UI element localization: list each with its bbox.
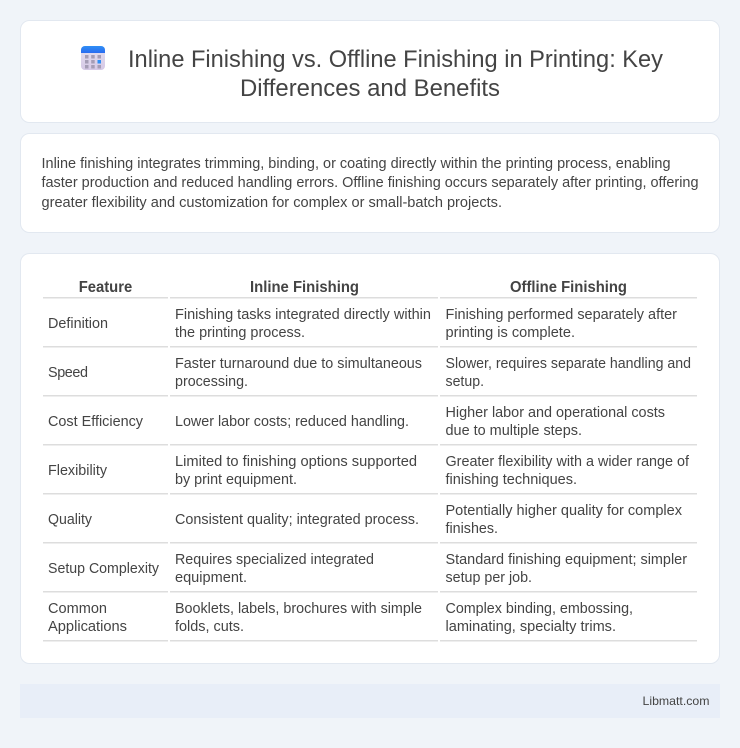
row: Cost Efficiency: Higher labor and operational costs [446,405,665,421]
row: Speed [43,356,697,396]
title [128,46,663,102]
row: Cost Efficiency [43,405,697,446]
row: Speed: Slower, requires separate handling and [446,356,691,372]
table header row [43,279,697,298]
footer [20,684,720,718]
summary paragraph: greater flexibility and customization for complex or small-batch projects. [42,195,502,211]
row: Definition: Finishing performed separately after [446,307,677,323]
title: Inline Finishing vs. Offline Finishing in Printing: Key [128,46,663,73]
row: Setup Complexity: setup per job. [446,570,532,586]
table header row: Feature [79,279,132,296]
row: Quality [43,503,697,544]
row: Speed: Faster turnaround due to simultaneous [175,356,422,372]
row: Definition: printing is complete. [446,325,575,341]
row: Setup Complexity: equipment. [175,570,247,586]
row: Definition: the printing process. [175,325,305,341]
summary paragraph: faster production and reduced handling errors. Offline finishing occurs separately after printing, offering [42,175,698,191]
summary paragraph: Inline finishing integrates trimming, binding, or coating directly within the printing process, enabling [42,156,670,172]
row: Flexibility: Greater flexibility with a wider range of [446,454,690,470]
row: Setup Complexity: Setup Complexity [48,561,160,577]
row: Setup Complexity: Standard finishing equipment; simpler [446,552,687,568]
row: Common Applications: laminating, specialty trims. [446,619,616,635]
row: Flexibility: Limited to finishing options supported [175,454,417,470]
row: Setup Complexity: Requires specialized integrated [175,552,374,568]
footer: Libmatt.com [642,694,710,708]
panel: summary [20,134,720,232]
row: Common Applications: Applications [48,619,127,635]
row: Speed: processing. [175,374,248,390]
row: Common Applications: Booklets, labels, brochures with simple [175,601,422,617]
panel: comparison table [20,254,720,664]
row: Common Applications: Complex binding, embossing, [446,601,633,617]
row: Setup Complexity [43,552,697,592]
row: Flexibility: Flexibility [48,463,108,479]
row: Flexibility: finishing techniques. [446,472,577,488]
table header row: Inline Finishing [250,279,359,296]
summary paragraph [42,156,698,211]
row: Cost Efficiency: Lower labor costs; reduced handling. [175,414,409,430]
row: Flexibility: by print equipment. [175,472,297,488]
row: Common Applications: Common [48,601,107,617]
row: Speed: Speed [48,365,88,381]
icon: calendar [81,46,105,70]
row: Quality: Consistent quality; integrated process. [175,512,419,528]
table header row: Offline Finishing [510,279,627,296]
row: Cost Efficiency: Cost Efficiency [48,414,144,430]
row: Cost Efficiency: due to multiple steps. [446,423,582,439]
row: Definition: Finishing tasks integrated directly within [175,307,431,323]
row: Definition [43,307,697,348]
row: Quality: Quality [48,512,93,528]
row: Speed: setup. [446,374,484,390]
row: Common Applications [43,601,697,642]
row: Flexibility [43,454,697,494]
row: Definition: Definition [48,316,108,332]
row: Common Applications: folds, cuts. [175,619,244,635]
panel: header [20,20,720,122]
title: Differences and Benefits [240,75,500,102]
row: Quality: finishes. [446,521,498,537]
row: Quality: Potentially higher quality for complex [446,503,683,519]
